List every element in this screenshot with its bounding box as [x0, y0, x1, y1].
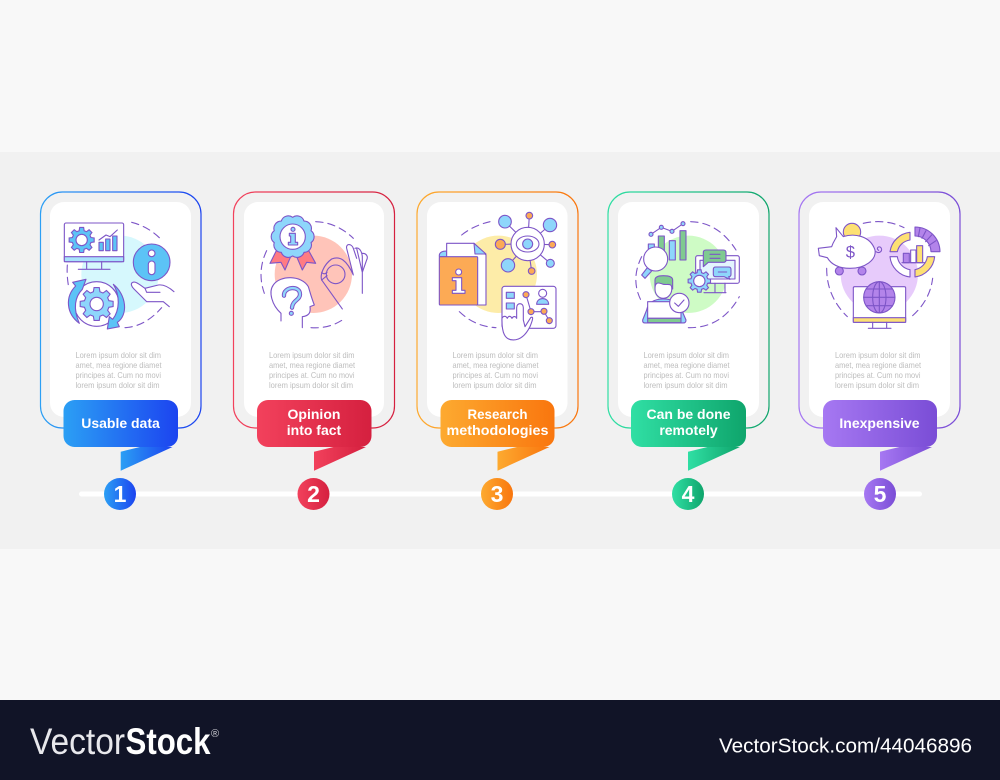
icon: piggy bank, chart, globe: $	[846, 243, 855, 262]
label text: Usable data	[81, 415, 160, 431]
icon: badge, question head, ok hand	[261, 216, 367, 328]
body text: Lorem ipsum dolor sit dim	[835, 350, 921, 360]
label text: Can be done	[646, 406, 731, 422]
label text: Research	[468, 406, 528, 422]
number badge: 1	[114, 481, 127, 507]
footer bar	[0, 700, 1000, 780]
card outline	[234, 192, 394, 428]
label tail	[688, 447, 740, 471]
panel 1: usable data	[40, 192, 201, 510]
footer logo: ®	[211, 728, 219, 740]
panel 2: opinion into fact	[234, 192, 394, 510]
card outline	[799, 192, 960, 428]
label text: remotely	[659, 422, 718, 438]
panel 4: can be done remotely	[608, 192, 769, 510]
panel 3: research methodologies	[417, 192, 578, 510]
white card	[244, 202, 384, 417]
white card	[50, 202, 191, 417]
number badge: 2	[307, 481, 320, 507]
body text: Lorem ipsum dolor sit dim	[452, 350, 538, 360]
label tail	[498, 447, 550, 471]
number badge	[104, 478, 136, 510]
icon: remote worker with charts	[636, 222, 739, 328]
footer logo: Vector	[30, 721, 125, 762]
label box	[64, 400, 178, 447]
body text: principes at. Cum no movi	[644, 370, 729, 380]
body text: Lorem ipsum dolor sit dim	[644, 350, 729, 360]
label box	[257, 400, 372, 447]
body text: amet, mea regione diamet	[76, 360, 162, 370]
number badge	[864, 478, 896, 510]
body text: principes at. Cum no movi	[835, 370, 921, 380]
label box	[823, 400, 937, 447]
card outline	[417, 192, 578, 428]
white card	[618, 202, 759, 417]
icon: folder, eye network, touch panel	[439, 212, 557, 340]
body text: lorem ipsum dolor sit dim	[452, 380, 537, 390]
number badge: 3	[491, 481, 503, 507]
white card	[427, 202, 568, 417]
panel 5: inexpensive	[799, 192, 960, 510]
body text: amet, mea regione diamet	[835, 360, 922, 370]
body text: lorem ipsum dolor sit dim	[644, 380, 728, 390]
number badge	[672, 478, 704, 510]
footer logo: Stock	[126, 721, 211, 762]
icon: data and information	[64, 222, 174, 329]
label text: Inexpensive	[839, 415, 920, 431]
number badge: 4	[682, 481, 695, 507]
label tail	[121, 447, 172, 471]
icon: piggy bank, chart, globe	[818, 222, 940, 328]
body text: amet, mea regione diamet	[644, 360, 730, 370]
body text: lorem ipsum dolor sit dim	[76, 380, 160, 390]
number badge: 5	[874, 481, 887, 507]
body text: Lorem ipsum dolor sit dim	[76, 350, 161, 360]
label tail	[880, 447, 932, 471]
label box	[440, 400, 554, 447]
label text: methodologies	[446, 422, 549, 438]
card outline	[608, 192, 769, 428]
body text: lorem ipsum dolor sit dim	[269, 380, 353, 390]
label box	[631, 400, 746, 447]
label text: into fact	[287, 422, 342, 438]
label tail	[314, 447, 366, 471]
body text: amet, mea regione diamet	[452, 360, 539, 370]
white card	[809, 202, 950, 417]
grey band	[0, 152, 1000, 549]
body text: amet, mea regione diamet	[269, 360, 356, 370]
timeline line	[79, 492, 922, 496]
body text: lorem ipsum dolor sit dim	[835, 380, 919, 390]
card outline	[40, 192, 201, 428]
label text: Opinion	[288, 406, 340, 422]
number badge	[481, 478, 513, 510]
number badge	[298, 478, 330, 510]
body text: principes at. Cum no movi	[269, 370, 355, 380]
body text: principes at. Cum no movi	[452, 370, 538, 380]
body text: principes at. Cum no movi	[76, 370, 161, 380]
footer image id: VectorStock.com/44046896	[719, 736, 972, 758]
body text: Lorem ipsum dolor sit dim	[269, 350, 355, 360]
